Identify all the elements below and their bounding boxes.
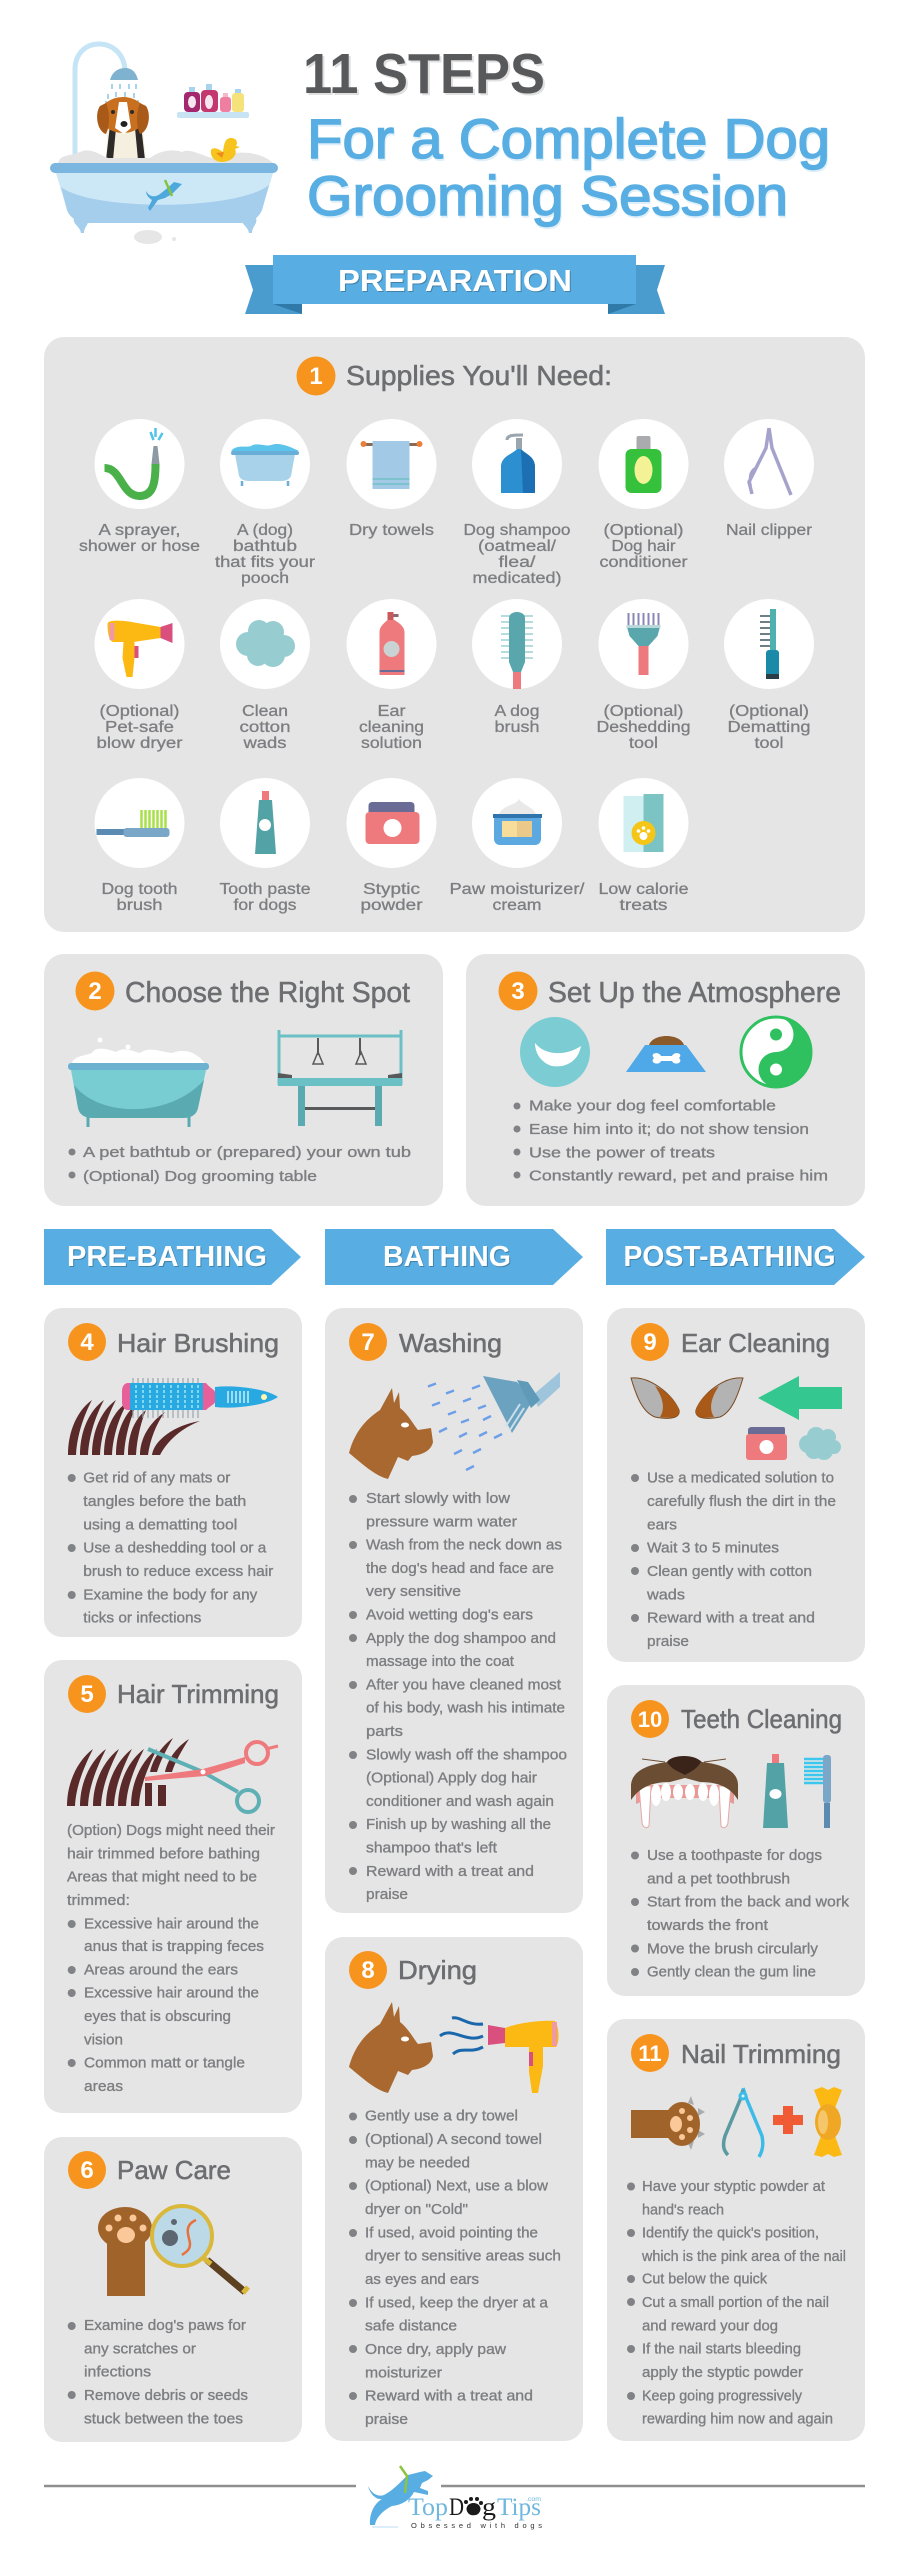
label: ear solution [359, 703, 424, 752]
list: step 5: eyes that is obscuring [84, 2008, 231, 2025]
list: step 7: very sensitive [366, 1583, 461, 1600]
label: clipper: Nail clipper [726, 522, 812, 539]
list: step 5: Areas around the ears [84, 1961, 238, 1978]
label: ear solution: solution [361, 735, 422, 752]
arrow: bathing: BATHING [383, 1241, 511, 1273]
list: step 10 [631, 1847, 850, 1981]
label: styptic: powder [360, 897, 422, 914]
heading: step 10: 10 [638, 1707, 662, 1732]
illustration: dog and dryer [349, 2002, 559, 2093]
list: step 8: safe distance [365, 2318, 457, 2335]
icon: comfort feather [520, 1017, 590, 1087]
panel: washing [325, 1308, 583, 1913]
label: cream: Paw moisturizer/ [450, 881, 585, 898]
icon: styptic powder [346, 778, 436, 868]
label: dog brush: brush [494, 719, 540, 736]
list: step 8: dryer on "Cold" [365, 2201, 468, 2218]
icon: pet bathtub [68, 1038, 209, 1127]
list: step 7: Finish up by washing all the [366, 1816, 551, 1833]
list: step 10: Use a toothpaste for dogs [647, 1847, 822, 1864]
panel: supplies [44, 337, 865, 932]
list: step 11: Cut below the quick [642, 2271, 767, 2288]
list: step 5: Common matt or tangle [84, 2055, 245, 2072]
panel: paw care [44, 2137, 302, 2442]
label: towels: Dry towels [349, 522, 434, 539]
list: step 8: as eyes and ears [365, 2271, 479, 2288]
label: dog brush [494, 703, 540, 736]
text: logo wordmark: g [482, 2494, 497, 2521]
illustration: paw with claws [631, 2096, 705, 2150]
icon: towel [346, 419, 436, 509]
list: step 7: Slowly wash off the shampoo [366, 1746, 567, 1763]
label: shampoo: (oatmeal/ [478, 538, 557, 555]
list: step 6: stuck between the toes [84, 2410, 243, 2427]
panel: choose the right spot [44, 954, 443, 1206]
label: dryer: blow dryer [96, 735, 182, 752]
panel: hair brushing [44, 1308, 302, 1637]
panel: hair trimming [44, 1660, 302, 2113]
banner: preparation [245, 255, 665, 314]
list: step 7: After you have cleaned most [366, 1676, 562, 1693]
label: deshedding [596, 703, 690, 752]
label: shampoo: Dog shampoo [464, 522, 570, 539]
label: treats [598, 881, 688, 914]
panel: drying [325, 1937, 583, 2441]
illustration: dog ears [631, 1378, 743, 1418]
label: conditioner [600, 522, 688, 571]
list: step 7: Wash from the neck down as [366, 1537, 562, 1554]
illustration: brush and hair [68, 1378, 278, 1455]
heading: step 8 [349, 1951, 477, 1989]
list: step 7: praise [366, 1886, 408, 1903]
heading: step 7 [349, 1323, 502, 1361]
label: shampoo: medicated) [472, 570, 562, 587]
list: step 7: (Optional) Apply dog hair [366, 1770, 537, 1787]
list: step 8: (Optional) A second towel [365, 2131, 542, 2148]
list: step 9: ears [647, 1516, 677, 1533]
heading: step 9: Ear Cleaning [681, 1328, 830, 1358]
list: step 7: the dog's head and face are [366, 1560, 554, 1577]
heading: step 5: 5 [80, 1681, 94, 1708]
list: step 3: Constantly reward, pet and praise him [529, 1168, 828, 1185]
heading: step 6: Paw Care [117, 2155, 231, 2185]
title: Grooming Session [307, 164, 788, 227]
arrow: pre-bathing [44, 1229, 301, 1285]
list: step 3: Make your dog feel comfortable [529, 1098, 776, 1115]
list: step 7: Reward with a treat and [366, 1863, 534, 1880]
text: logo wordmark: .com [526, 2497, 541, 2503]
list: step 10: towards the front [647, 1917, 769, 1934]
heading: step 7: Washing [399, 1328, 502, 1358]
heading: step 6 [68, 2151, 231, 2189]
list: step 5 [68, 1915, 264, 2095]
list: step 5: anus that is trapping feces [84, 1938, 264, 1955]
list: step 8: Once dry, apply paw [365, 2341, 506, 2358]
list: step 8 [349, 2108, 561, 2428]
list: step 4: tangles before the bath [83, 1493, 246, 1510]
list: step 11: Have your styptic powder at [642, 2178, 826, 2195]
label: deshedding: (Optional) [604, 703, 684, 720]
label: dryer: (Optional) [100, 703, 180, 720]
heading: step 3: Set Up the Atmosphere [548, 977, 841, 1009]
icon: sprayer hose [94, 419, 184, 509]
list: step 4: Examine the body for any [83, 1586, 258, 1603]
text: logo wordmark: Tips [497, 2494, 541, 2521]
list: step 11: Identify the quick's position, [642, 2225, 819, 2242]
heading: supplies: 1 [309, 363, 323, 390]
illustration: dog and shower [349, 1372, 560, 1479]
label: bathtub: pooch [241, 570, 289, 587]
heading: step 5: Hair Trimming [117, 1679, 279, 1709]
label: dog brush: A dog [494, 703, 540, 720]
icon: cotton [799, 1427, 841, 1460]
label: conditioner: Dog hair [612, 538, 676, 555]
label: deshedding: tool [629, 735, 658, 752]
label: tooth paste: for dogs [234, 897, 297, 914]
label: sprayer: A sprayer, [98, 522, 180, 539]
icon: plus [773, 2106, 803, 2134]
list: step 10: Start from the back and work [647, 1894, 850, 1911]
label: bathtub: that fits your [215, 554, 315, 571]
panel: teeth cleaning [607, 1685, 865, 1996]
list: step 2 [68, 1144, 411, 1185]
illustration: dog in bathtub [50, 44, 278, 244]
label: cream: cream [492, 897, 542, 914]
heading: step 11 [631, 2034, 841, 2072]
heading: step 2: 2 [88, 978, 102, 1005]
list: step 9: Clean gently with cotton [647, 1563, 812, 1580]
heading: step 2 [76, 972, 410, 1010]
heading: step 10 [631, 1700, 842, 1738]
list: step 8: Gently use a dry towel [365, 2108, 518, 2125]
list: step 8: (Optional) Next, use a blow [365, 2178, 548, 2195]
label: sprayer: shower or hose [79, 538, 200, 555]
list: step 5: vision [84, 2031, 123, 2048]
list: step 11: If the nail starts bleeding [642, 2341, 801, 2358]
text: logo wordmark: D [449, 2494, 464, 2521]
list: step 10: Gently clean the gum line [647, 1964, 816, 1981]
text: logo wordmark: o [466, 2494, 481, 2521]
icon: ear solution [346, 599, 436, 689]
text: trimming intro: Areas that might need to be [67, 1869, 257, 1886]
icon: blow dryer [94, 599, 184, 689]
list: step 7: of his body, wash his intimate [366, 1700, 565, 1717]
list: step 9: Use a medicated solution to [647, 1470, 834, 1487]
panel: nail trimming [607, 2019, 865, 2441]
label: styptic [360, 881, 422, 914]
list: step 11: Cut a small portion of the nail [642, 2294, 829, 2311]
logo: top dog tips [368, 2466, 542, 2530]
heading: step 10: Teeth Cleaning [681, 1704, 842, 1734]
icon: yin yang [741, 1017, 811, 1087]
list: step 8: If used, avoid pointing the [365, 2224, 538, 2241]
icon: clipper [724, 2088, 763, 2157]
list: step 5: areas [84, 2078, 123, 2095]
illustration: paw and magnifier [98, 2206, 248, 2296]
panel: set up the atmosphere [466, 954, 865, 1206]
list: step 3: Ease him into it; do not show tension [529, 1121, 809, 1138]
icon: solution jar [746, 1427, 787, 1460]
list: step 11 [627, 2178, 846, 2428]
arrow: post-bathing: POST-BATHING [624, 1241, 836, 1273]
list: step 6: infections [84, 2364, 151, 2381]
text: trimming intro: trimmed: [67, 1892, 130, 1909]
icon: tooth paste [763, 1754, 788, 1828]
label: cotton: wads [242, 735, 287, 752]
list: step 8: Reward with a treat and [365, 2388, 533, 2405]
list: step 7: parts [366, 1723, 403, 1740]
title [303, 42, 830, 227]
list: step 6: Examine dog's paws for [84, 2317, 246, 2334]
list: step 7: Apply the dog shampoo and [366, 1630, 556, 1647]
label: treats: Low calorie [598, 881, 688, 898]
icon: candy treat [814, 2087, 842, 2157]
list: step 11: hand's reach [642, 2201, 724, 2218]
illustration: scissors and hair [67, 1738, 278, 1812]
heading: step 4 [68, 1323, 279, 1361]
list: step 8: If used, keep the dryer at a [365, 2294, 549, 2311]
label: treats: treats [620, 897, 668, 914]
label: tooth brush [102, 881, 178, 914]
list: step 7: pressure warm water [366, 1513, 517, 1530]
icon: dog brush [472, 599, 562, 689]
heading: step 3 [498, 972, 841, 1010]
icon: grooming table [278, 1030, 402, 1126]
label: cream [450, 881, 585, 914]
heading: step 11: Nail Trimming [681, 2039, 841, 2069]
list: step 11: which is the pink area of the nail [641, 2248, 846, 2265]
list: step 5: Excessive hair around the [84, 1985, 259, 2002]
title: For a Complete Dog [307, 107, 830, 170]
label: dematting: Dematting [728, 719, 810, 736]
list: step 2: (Optional) Dog grooming table [83, 1168, 317, 1185]
list: step 5: Excessive hair around the [84, 1915, 259, 1932]
icon: bathtub [220, 419, 310, 509]
list: step 4: Use a deshedding tool or a [83, 1540, 267, 1557]
icon: tooth paste [220, 778, 310, 868]
icon: dematting tool [724, 599, 814, 689]
text: logo wordmark: Top [408, 2494, 448, 2521]
heading: step 11: 11 [638, 2041, 662, 2066]
icon: food bowl [626, 1036, 706, 1072]
label: dematting: (Optional) [729, 703, 809, 720]
label: shampoo: flea/ [498, 554, 536, 571]
heading: step 8: Drying [398, 1955, 477, 1985]
heading: step 4: 4 [80, 1329, 94, 1356]
list: step 9: Wait 3 to 5 minutes [647, 1540, 779, 1557]
label: dryer: Pet-safe [105, 719, 174, 736]
label: tooth paste: Tooth paste [220, 881, 310, 898]
list: step 2: A pet bathtub or (prepared) your own tub [83, 1144, 411, 1161]
icon: logo dog [368, 2466, 433, 2527]
list: step 3 [514, 1098, 828, 1185]
heading: step 6: 6 [80, 2157, 94, 2184]
list: step 10: Move the brush circularly [647, 1940, 819, 1957]
heading: supplies [296, 356, 612, 396]
label: ear solution: cleaning [359, 719, 424, 736]
heading: step 9: 9 [643, 1329, 657, 1356]
heading: step 2: Choose the Right Spot [125, 977, 410, 1009]
list: step 4: ticks or infections [83, 1610, 201, 1627]
list: step 4: Get rid of any mats or [83, 1470, 230, 1487]
list: step 9: wads [646, 1586, 685, 1603]
list: step 3: Use the power of treats [529, 1144, 715, 1161]
text: logo wordmark [408, 2494, 542, 2530]
icon: tooth brush [94, 778, 184, 868]
list: step 11: rewarding him now and again [642, 2411, 833, 2428]
text: trimming intro [67, 1822, 275, 1909]
label: tooth brush: Dog tooth [102, 881, 178, 898]
text: trimming intro: hair trimmed before bathing [67, 1845, 260, 1862]
list: step 9: carefully flush the dirt in the [647, 1493, 836, 1510]
label: dematting [728, 703, 810, 752]
list: step 11: Keep going progressively [642, 2387, 802, 2404]
icon: tooth brush [804, 1755, 831, 1828]
heading: step 5 [68, 1675, 279, 1713]
label: deshedding: Deshedding [596, 719, 690, 736]
icon: deshedding tool [598, 599, 688, 689]
icon: shampoo [472, 419, 562, 509]
list: step 7: Avoid wetting dog's ears [366, 1606, 533, 1624]
label: conditioner: conditioner [600, 554, 688, 571]
list: step 8: praise [365, 2411, 408, 2428]
heading: step 3: 3 [511, 978, 525, 1005]
label: bathtub: bathtub [233, 538, 297, 555]
list: step 6: any scratches or [84, 2340, 196, 2357]
list: step 9: Reward with a treat and [647, 1610, 815, 1627]
list: step 9: praise [647, 1633, 689, 1650]
list: step 6 [68, 2317, 248, 2427]
icon: nail clipper [724, 419, 814, 509]
label: shampoo [464, 522, 570, 587]
list: step 7: massage into the coat [366, 1653, 515, 1670]
list: step 11: apply the styptic powder [642, 2364, 803, 2381]
label: bathtub: A (dog) [237, 522, 293, 539]
illustration: dog teeth [631, 1756, 738, 1828]
list: step 7: conditioner and wash again [366, 1793, 554, 1810]
list: step 10: and a pet toothbrush [647, 1870, 790, 1887]
heading: step 8: 8 [361, 1957, 375, 1984]
list: step 8: moisturizer [365, 2364, 442, 2381]
label: styptic: Styptic [363, 881, 420, 898]
label: bathtub [215, 522, 315, 587]
list: step 11: and reward your dog [642, 2317, 778, 2334]
banner: preparation: PREPARATION [338, 263, 572, 298]
label: dematting: tool [754, 735, 784, 752]
text: logo wordmark: Obsessed with dogs [411, 2521, 542, 2530]
icon: cotton wads [220, 599, 310, 689]
list: step 6: Remove debris or seeds [84, 2387, 248, 2404]
list: step 9 [631, 1470, 836, 1650]
list: step 8: may be needed [365, 2154, 470, 2171]
list: step 4 [68, 1470, 273, 1627]
heading: step 7: 7 [361, 1329, 375, 1356]
arrow: point to ears [758, 1376, 842, 1420]
heading: step 4: Hair Brushing [117, 1328, 279, 1358]
list: step 7: Start slowly with low [366, 1490, 510, 1507]
label: sprayer [79, 522, 200, 555]
title: 11 STEPS [303, 42, 545, 106]
icon: conditioner [598, 419, 688, 509]
list: step 4: using a dematting tool [83, 1516, 237, 1533]
icon: paw cream [472, 778, 562, 868]
text: trimming intro: (Option) Dogs might need their [67, 1822, 275, 1839]
panel: ear cleaning [607, 1308, 865, 1662]
label: cotton [240, 703, 290, 752]
list: step 8: dryer to sensitive areas such [365, 2248, 561, 2265]
list: step 7: shampoo that's left [366, 1840, 498, 1856]
icon: treats [598, 778, 688, 868]
label: cotton: Clean [242, 703, 288, 720]
arrow: post-bathing [606, 1229, 865, 1285]
heading: step 9 [631, 1323, 830, 1361]
list: step 7 [349, 1490, 567, 1903]
label: dryer [96, 703, 182, 752]
label: tooth paste [220, 881, 310, 914]
label: ear solution: Ear [378, 703, 406, 720]
label: tooth brush: brush [116, 897, 162, 914]
list: step 4: brush to reduce excess hair [83, 1563, 273, 1580]
label: cotton: cotton [240, 719, 290, 736]
arrow: pre-bathing: PRE-BATHING [67, 1241, 267, 1273]
arrow: bathing [325, 1229, 583, 1285]
heading: supplies: Supplies You'll Need: [346, 360, 612, 391]
label: conditioner: (Optional) [604, 522, 684, 539]
